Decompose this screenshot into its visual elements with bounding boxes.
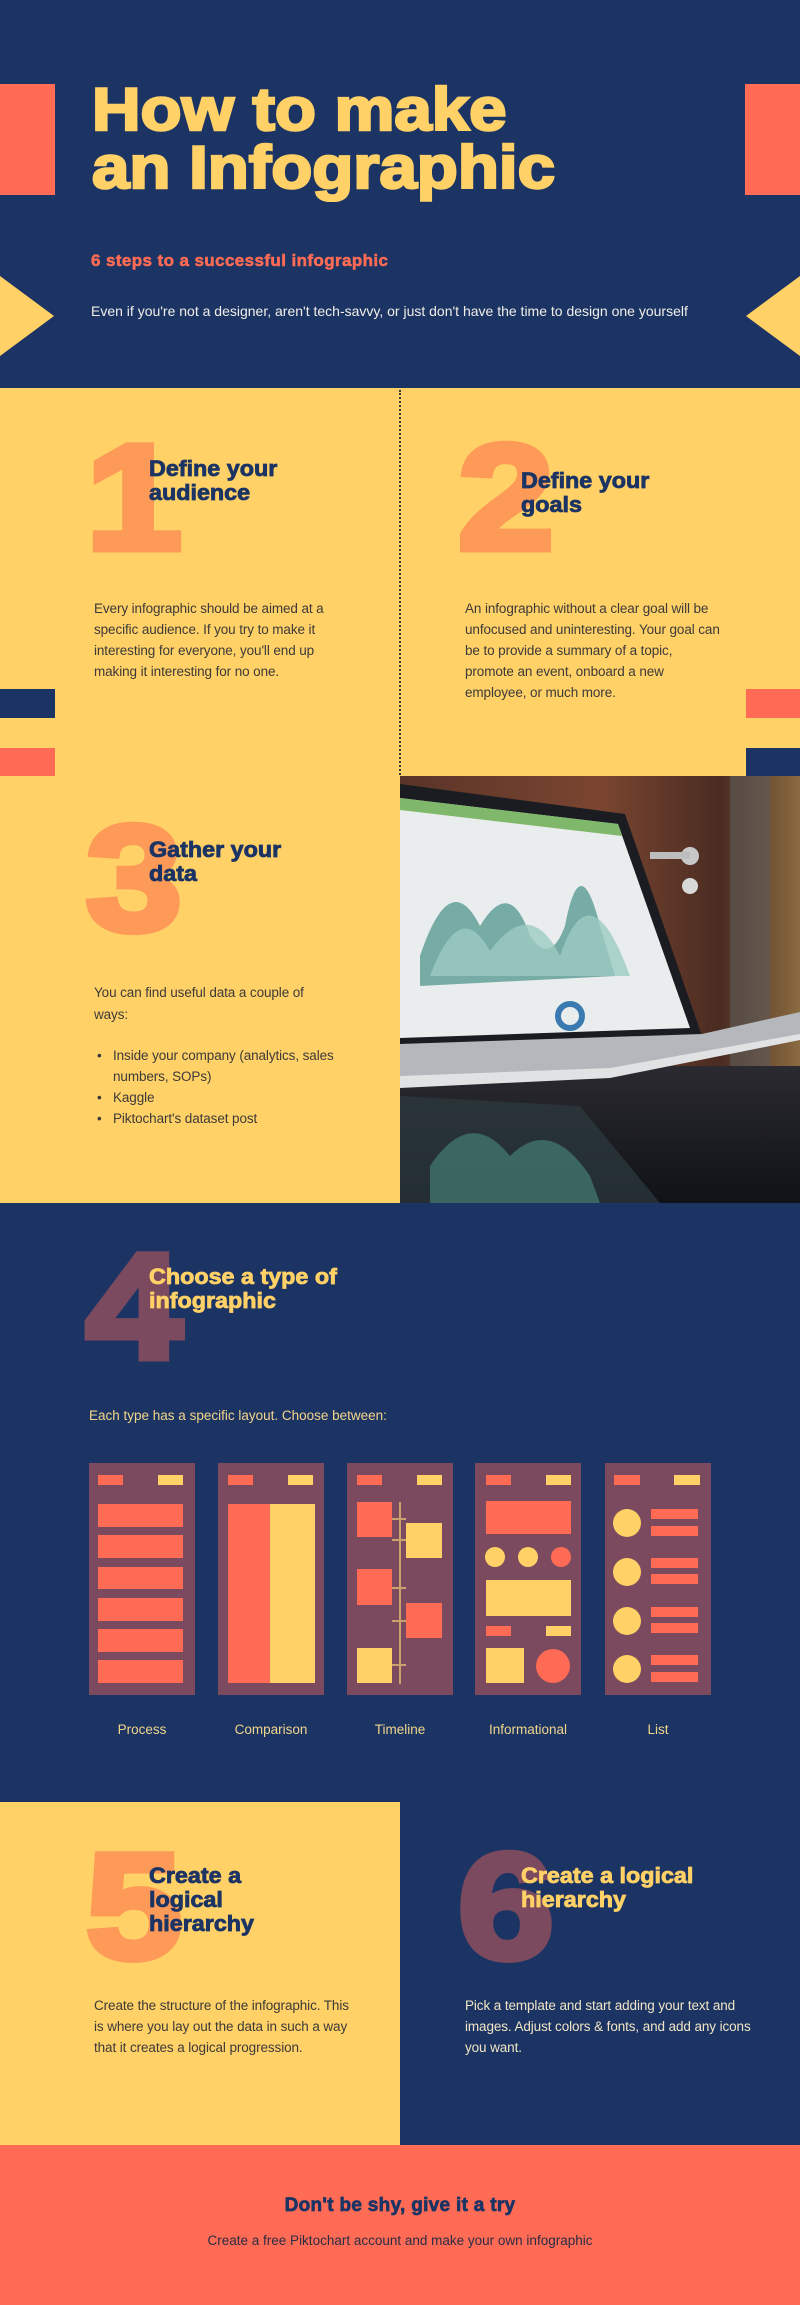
decor: right navy bar bbox=[746, 748, 800, 776]
bullet list: • bbox=[97, 1111, 102, 1126]
yellow section steps 1-3 bbox=[0, 388, 800, 1203]
title: an Infographic bbox=[92, 134, 555, 201]
card labels: Informational bbox=[489, 1722, 567, 1737]
decor: left navy bar bbox=[0, 689, 55, 718]
bullet list: Piktochart's dataset post bbox=[113, 1111, 257, 1126]
heading 3: data bbox=[149, 861, 197, 886]
section 4 background bbox=[0, 1203, 800, 1802]
text 5: Create the structure of the infographic. This is where you lay out the data in such a way that it creates a logical progression. bbox=[94, 1998, 349, 2055]
panel: step 6 bbox=[400, 1802, 800, 2145]
card labels: Comparison bbox=[235, 1722, 307, 1737]
card labels bbox=[118, 1722, 668, 1737]
decor: left yellow triangle bbox=[0, 276, 54, 356]
footer text: Create a free Piktochart account and make your own infographic bbox=[208, 2233, 592, 2248]
number 3: 3 bbox=[86, 794, 182, 962]
intro text: Even if you're not a designer, aren't tech-savvy, or just don't have the time to design one yourself bbox=[91, 303, 688, 319]
number 2: 2 bbox=[458, 413, 554, 581]
subtitle: 6 steps to a successful infographic bbox=[91, 251, 388, 270]
heading 2: goals bbox=[521, 492, 582, 517]
card labels: Timeline bbox=[375, 1722, 425, 1737]
card labels: Process bbox=[118, 1722, 166, 1737]
heading 6 bbox=[521, 1863, 693, 1912]
heading 2 bbox=[521, 468, 650, 517]
text 2: An infographic without a clear goal will be unfocused and uninteresting. Your goal can be to provide a summary of a topic, promote an event, onboard a new employee, or much more. bbox=[465, 601, 720, 700]
number 5: 5 bbox=[86, 1822, 182, 1990]
title bbox=[92, 76, 555, 202]
text 3: You can find useful data a couple of ways: bbox=[94, 985, 304, 1022]
decor: right yellow triangle bbox=[746, 276, 800, 356]
footer bbox=[0, 2145, 800, 2305]
number 4: 4 bbox=[86, 1222, 182, 1390]
heading 5: logical bbox=[149, 1887, 223, 1912]
heading 5: Create a bbox=[149, 1863, 241, 1888]
photo: laptop with dashboard bbox=[400, 776, 800, 1203]
number 6: 6 bbox=[458, 1822, 554, 1990]
text 1: Every infographic should be aimed at a specific audience. If you try to make it interesting for everyone, you'll end up making it interesting for no one. bbox=[94, 601, 324, 679]
decor: left coral bar bbox=[0, 748, 55, 776]
decor: left coral block bbox=[0, 84, 55, 195]
heading 4: Choose a type of bbox=[149, 1264, 337, 1289]
heading 4: infographic bbox=[149, 1288, 276, 1313]
infographic type cards bbox=[89, 1463, 711, 1695]
heading 6: Create a logical bbox=[521, 1863, 693, 1888]
text 4: Each type has a specific layout. Choose between: bbox=[89, 1408, 387, 1423]
panel: step 4 bbox=[84, 1222, 387, 1423]
panel: step 3 bbox=[86, 794, 334, 1126]
decor: right coral block bbox=[745, 84, 800, 195]
heading 5: hierarchy bbox=[149, 1911, 254, 1936]
decor: right coral bar bbox=[746, 689, 800, 718]
bullet list bbox=[97, 1048, 334, 1126]
footer heading: Don't be shy, give it a try bbox=[285, 2195, 515, 2216]
bullet list: Kaggle bbox=[113, 1090, 154, 1105]
card: timeline bbox=[347, 1463, 453, 1695]
card: list bbox=[605, 1463, 711, 1695]
heading 1 bbox=[149, 456, 278, 505]
heading 2: Define your bbox=[521, 468, 649, 493]
title: How to make bbox=[92, 76, 506, 143]
card: informational bbox=[475, 1463, 581, 1695]
heading 4 bbox=[149, 1264, 338, 1313]
panel: step 1 bbox=[86, 413, 324, 679]
card: comparison bbox=[218, 1463, 324, 1695]
text 6: Pick a template and start adding your text and images. Adjust colors & fonts, and add any icons you want. bbox=[465, 1998, 751, 2055]
heading 3 bbox=[149, 837, 282, 886]
heading 1: Define your bbox=[149, 456, 277, 481]
heading 5 bbox=[149, 1863, 254, 1936]
panel: step 2 bbox=[458, 413, 720, 700]
panel: step 5 bbox=[0, 1802, 400, 2145]
bullet list: • bbox=[97, 1090, 102, 1105]
bullet list: Inside your company (analytics, sales numbers, SOPs) bbox=[113, 1048, 334, 1084]
decor: dotted divider bbox=[399, 390, 401, 775]
number 1: 1 bbox=[86, 413, 182, 581]
heading 3: Gather your bbox=[149, 837, 281, 862]
card labels: List bbox=[647, 1722, 668, 1737]
header section bbox=[0, 0, 800, 388]
bullet list: • bbox=[97, 1048, 102, 1063]
card: process bbox=[89, 1463, 195, 1695]
heading 1: audience bbox=[149, 480, 250, 505]
heading 6: hierarchy bbox=[521, 1887, 626, 1912]
